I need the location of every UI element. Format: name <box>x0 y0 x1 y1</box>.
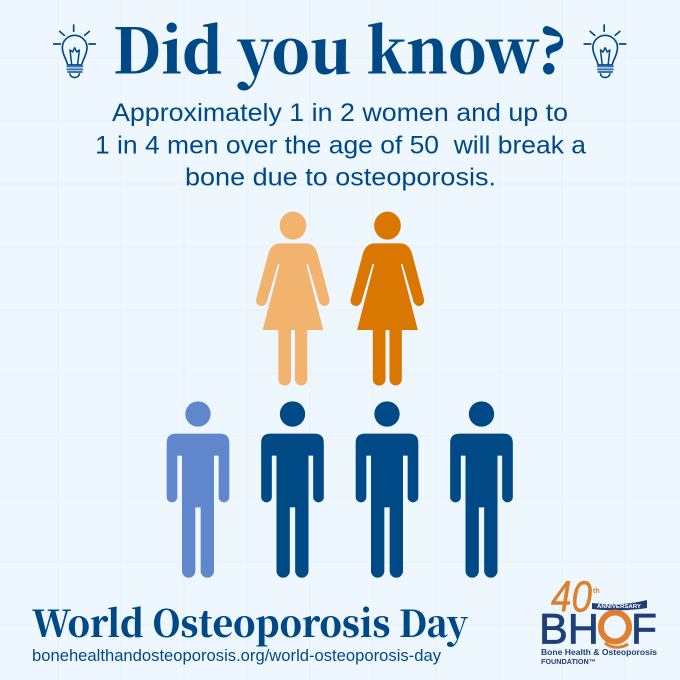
icon: woman, dark orange <box>351 212 424 386</box>
statistic text block: 1 in 4 men over the age of 50 will break a <box>95 132 586 160</box>
footer heading: World Osteoporosis Day <box>32 594 469 648</box>
BHOF letters <box>539 606 657 654</box>
icon: man, navy 2 <box>356 401 418 578</box>
statistic text block <box>95 99 586 192</box>
footer url: bonehealthandosteoporosis.org/world-osteoporosis-day <box>32 646 441 665</box>
BHOF letters: F <box>631 606 657 654</box>
title: Did you know? <box>113 2 567 92</box>
BHOF letters: BH <box>539 606 599 654</box>
statistic text block: Approximately 1 in 2 women and up to <box>112 99 568 127</box>
foundation name: Bone Health & Osteoporosis <box>541 647 657 657</box>
icon: woman, light orange <box>256 212 330 386</box>
pictogram: 1 in 2 women <box>256 212 424 386</box>
icon: right lightbulb <box>584 25 626 77</box>
foundation name: FOUNDATION™ <box>541 659 596 666</box>
icon: man, navy 3 <box>450 401 513 578</box>
logo: BHOF 40th anniversary <box>539 572 657 666</box>
pictogram: 1 in 4 men <box>167 401 513 578</box>
anniversary ribbon: ANNIVERSARY <box>597 604 641 610</box>
statistic text block: bone due to osteoporosis. <box>185 164 496 192</box>
40th mark: 40 <box>551 572 592 622</box>
icon: left lightbulb <box>54 25 95 77</box>
icon: man, light blue <box>167 401 229 578</box>
foundation name <box>541 647 657 666</box>
40th mark: th <box>593 588 600 595</box>
icon: man, navy 1 <box>261 401 324 578</box>
